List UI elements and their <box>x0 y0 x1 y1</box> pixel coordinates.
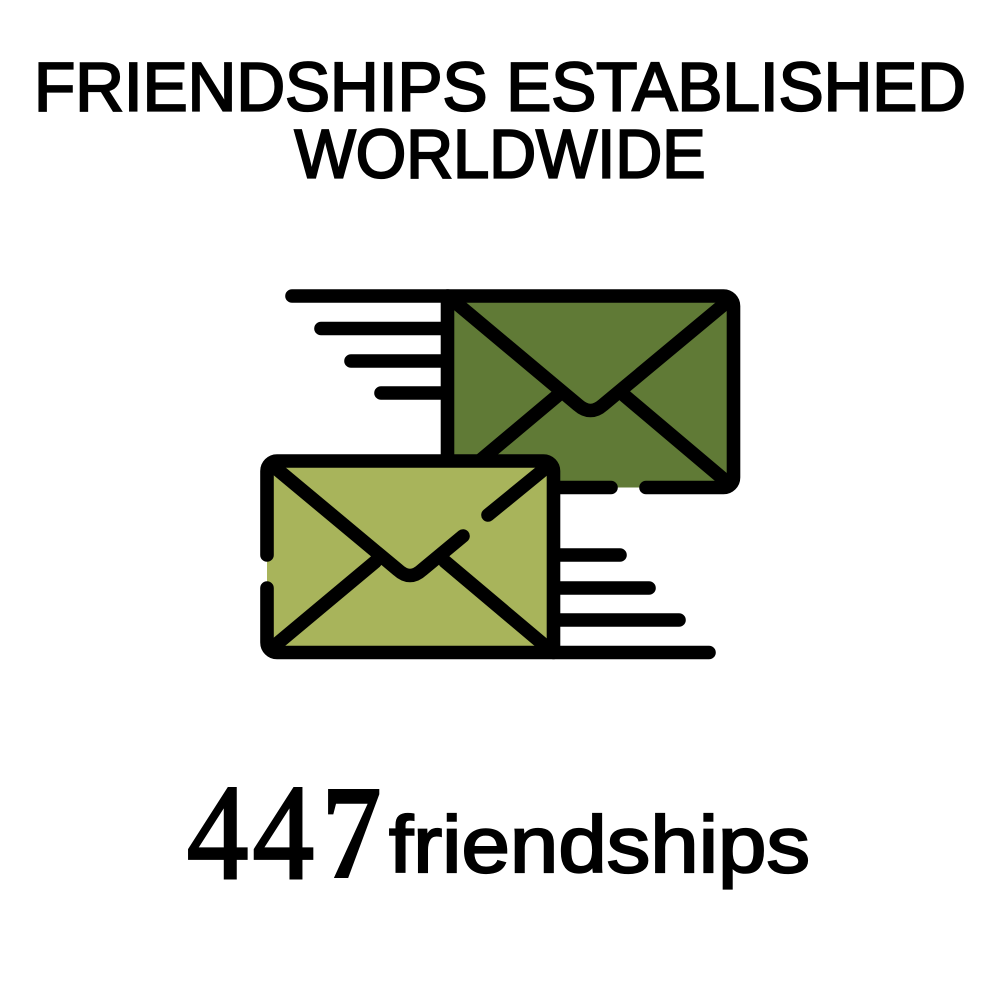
icon: back envelope <box>448 296 734 488</box>
speed lines: back envelope <box>292 296 448 393</box>
unit label: friendships <box>389 800 810 889</box>
title <box>34 48 966 192</box>
title: WORLDWIDE <box>294 116 706 192</box>
statistic: 447 friendships <box>187 757 810 907</box>
number: 4 <box>187 757 248 907</box>
title: FRIENDSHIPS ESTABLISHED <box>34 48 966 126</box>
icon: front envelope <box>267 461 554 652</box>
speed lines: front envelope <box>554 555 709 652</box>
number: 7 <box>321 757 382 907</box>
number: 4 <box>253 757 314 907</box>
icon: two flying envelopes <box>267 296 734 652</box>
